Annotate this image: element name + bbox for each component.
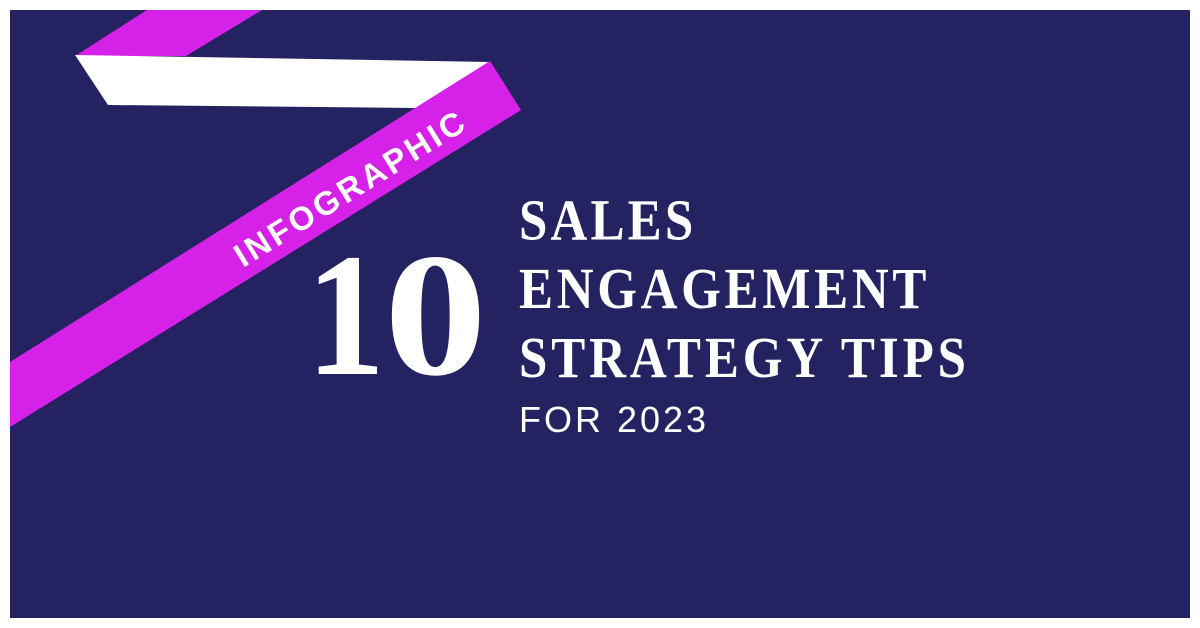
ribbon label: INFOGRAPHIC xyxy=(227,102,474,274)
ribbon: top magenta fold xyxy=(75,10,262,56)
big number 10: 1 xyxy=(306,218,385,413)
title line 1: SALES xyxy=(519,187,693,252)
big number 10 xyxy=(306,218,487,413)
title block xyxy=(519,187,966,390)
ribbon: main magenta band xyxy=(10,61,521,427)
big number 10: 0 xyxy=(384,218,487,413)
title line 2: ENGAGEMENT xyxy=(519,256,926,321)
subtitle: FOR 2023 xyxy=(519,399,709,440)
ribbon: white fold xyxy=(75,55,490,108)
title line 3: STRATEGY TIPS xyxy=(519,325,966,390)
